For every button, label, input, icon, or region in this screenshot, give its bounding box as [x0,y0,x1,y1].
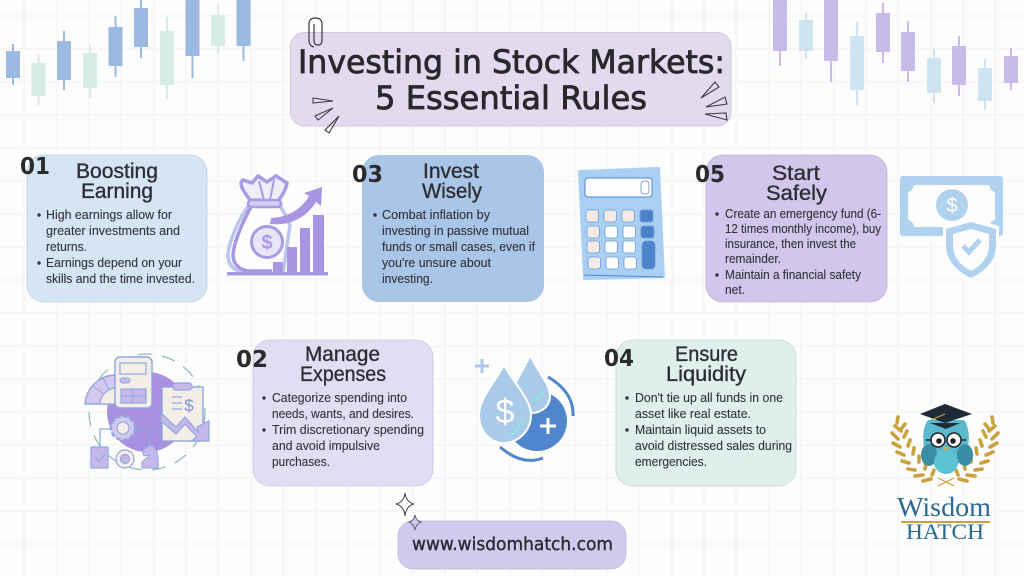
body text [37,207,195,286]
icon: expense management cluster [85,354,209,470]
icon: paperclip [309,18,322,47]
body text: returns. [46,239,87,254]
body text: 12 times monthly income), buy [725,221,881,236]
body text: Maintain liquid assets to [635,422,766,437]
panel: 05 start safely [695,155,887,302]
heading: Boosting [76,160,158,183]
heading: Invest [423,160,479,183]
icon: owl [920,404,973,486]
step number 04: 04 [604,346,634,372]
heading: Expenses [300,363,386,386]
panel: 03 invest wisely [352,155,544,302]
body text: needs, wants, and desires. [272,406,414,421]
wordmark [897,492,991,544]
heading: Earning [81,180,153,203]
body text [625,390,792,469]
title: Investing in Stock Markets: [298,43,725,81]
body text: insurance, then invest the [725,236,856,251]
body text: purchases. [272,454,330,469]
wordmark: Wisdom [897,492,991,522]
icon: large sparkle [396,493,414,516]
icon: expense management cluster: $ [184,396,194,415]
icon: laurel wreath [892,417,998,481]
body text: net. [725,282,745,297]
icon: banknote with shield [900,176,1003,282]
body text: greater investments and [46,223,180,238]
step number 05: 05 [695,162,725,188]
heading: Ensure [675,343,738,366]
heading: Start [772,162,820,185]
body text [262,390,424,469]
body text: Trim discretionary spending [272,422,424,437]
heading: Wisely [422,180,482,203]
heading [300,343,386,386]
body text: and avoid impulsive [272,438,380,453]
heading [76,160,158,203]
step number 02: 02 [236,347,268,373]
icon: left burst rays [313,98,339,133]
body text [715,206,881,297]
title: 5 Essential Rules [375,79,647,117]
body text: Earnings depend on your [46,255,183,270]
body text: Maintain a financial safety [725,267,861,282]
step number 03: 03 [352,162,383,188]
website pill [398,521,626,569]
body text: you're unsure about [382,255,491,270]
icon: banknote with shield: $ [946,195,958,217]
panel: 02 manage expenses [236,340,433,486]
body text: remainder. [725,251,781,266]
panel: 04 ensure liquidity [604,340,796,486]
body text: skills and the time invested. [46,271,195,286]
chart: candlesticks top left [6,0,250,105]
body text: investing in passive mutual [382,223,529,238]
body text: High earnings allow for [46,207,173,222]
icon: liquidity drops: $ [496,393,515,431]
heading: Liquidity [666,363,747,386]
body text: emergencies. [635,454,707,469]
body text: Create an emergency fund (6- [725,206,881,221]
icon: calculator [578,167,665,280]
icon: money bag with rising bars [227,176,328,276]
title panel [290,32,731,126]
body text: avoid distressed sales during [635,438,792,453]
body text: Categorize spending into [272,390,407,405]
body text [373,207,535,286]
heading [422,160,482,203]
body text: asset like real estate. [635,406,751,421]
wordmark: HATCH [906,519,984,544]
heading: Manage [305,343,380,366]
chart: candlesticks top right [773,0,1018,110]
body text: investing. [382,271,433,286]
panel: 01 boosting earning [20,154,207,302]
icon: money bag with rising bars: $ [261,232,273,254]
icon: right burst rays [701,82,727,120]
heading [766,162,828,205]
heading: Safely [766,182,828,205]
heading [666,343,747,386]
icon: liquidity drops [475,355,573,460]
logo: wisdom hatch [892,404,998,544]
body text: Don't tie up all funds in one [635,390,783,405]
icon: small sparkle [409,515,421,530]
title [298,43,725,117]
step number 01: 01 [20,154,50,180]
body text: funds or small cases, even if [382,239,535,254]
body text: Combat inflation by [382,207,490,222]
website url: www.wisdomhatch.com [412,534,613,555]
